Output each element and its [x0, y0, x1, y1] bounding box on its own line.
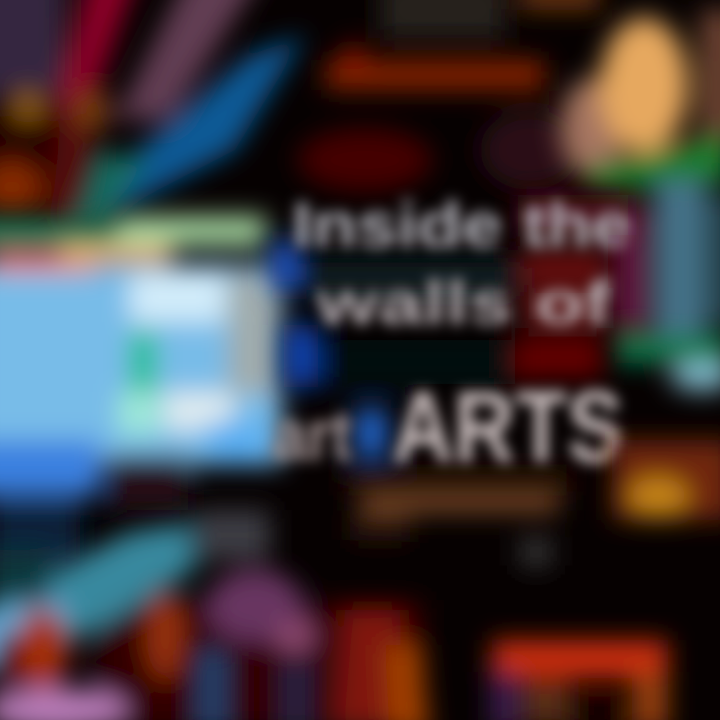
panel: top red band: [297, 0, 600, 192]
title: walls of: [315, 269, 611, 338]
panel: right orange glow: [350, 440, 720, 566]
panel: bottom-right red card: [490, 640, 668, 720]
title: ARTS: [392, 370, 624, 484]
panel: top-right figure: [560, 10, 720, 391]
panel: left chart block: [0, 216, 282, 570]
panel: bottom-left colored stripes: [0, 510, 430, 720]
title: Inside the: [292, 189, 632, 261]
panel: title backdrop: [272, 195, 628, 488]
panel: top-left diagonal bands: [0, 0, 305, 225]
title: [272, 189, 632, 484]
title: art: [272, 396, 352, 476]
